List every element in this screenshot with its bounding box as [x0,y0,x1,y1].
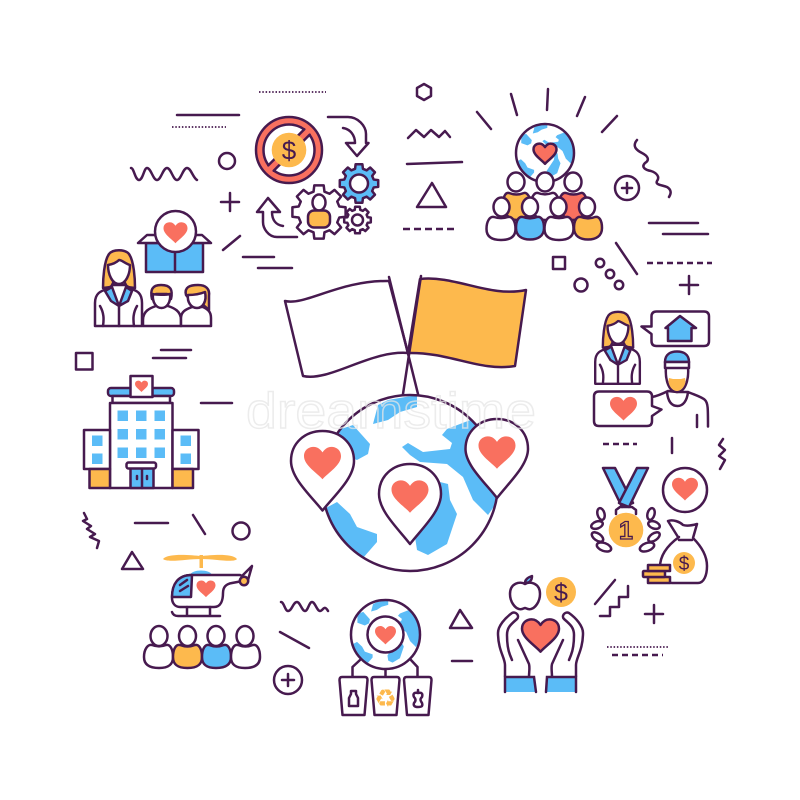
central illustration: flags on globe [285,276,528,571]
right hand [552,613,583,677]
icon: no money and process gears [256,117,378,239]
icon: hospital [84,376,198,488]
laurels [590,507,661,553]
icon: person gear [292,185,346,239]
pin: right [466,419,528,498]
woman [95,250,142,326]
globe with heart [516,124,575,182]
left cuff [505,677,536,692]
girl [181,285,211,326]
box [138,211,211,272]
helicopter [163,555,252,616]
flag: orange [403,276,526,394]
right cuff [546,677,576,692]
icon: doctor conversation [594,312,709,427]
heart badge [663,468,707,512]
icon: blue gear [340,164,378,203]
icon: donation box and family [95,211,211,326]
bin: apple core [404,677,432,715]
bubble: heart [594,392,662,426]
door [130,468,154,488]
icon: medal and money [590,468,707,583]
pin: left [291,431,354,510]
ribbon [603,468,648,514]
left wing [84,430,110,469]
flag: white [285,277,418,394]
apple [510,576,540,609]
decorative marks [76,84,725,694]
left hand [498,613,529,677]
dollar coin: $ [554,579,568,607]
connectors [352,659,418,677]
front row people [486,198,602,240]
sign [130,376,152,397]
icon: people around heart globe [486,124,602,240]
icon: crossed dollar: $ [282,136,297,166]
windows [92,410,191,464]
medal: 1 [619,517,633,545]
bin: bottle [340,677,368,715]
nurse man [652,352,708,427]
pin: centre [379,464,441,544]
doctor [595,312,640,384]
arrow: down [328,117,368,156]
main building [110,403,172,488]
arrow: up [257,198,297,237]
icon: globe and recycling bins [340,600,432,715]
people row [144,626,260,668]
roof [108,388,174,396]
icon: hands holding heart [498,576,583,692]
bin: recycling: ♻ [374,684,397,713]
globe [322,395,500,571]
boy [143,285,181,326]
watermark: dreamstime [246,383,536,439]
infographic canvas [74,82,726,716]
heart [522,619,559,652]
right wing [172,430,198,469]
money bag: $ [679,554,690,575]
back row people [503,172,587,220]
icon: small gear [344,207,371,233]
globe [351,600,421,669]
coins [643,565,670,583]
bubble: house [642,312,709,346]
icon: helicopter and people [144,555,260,668]
